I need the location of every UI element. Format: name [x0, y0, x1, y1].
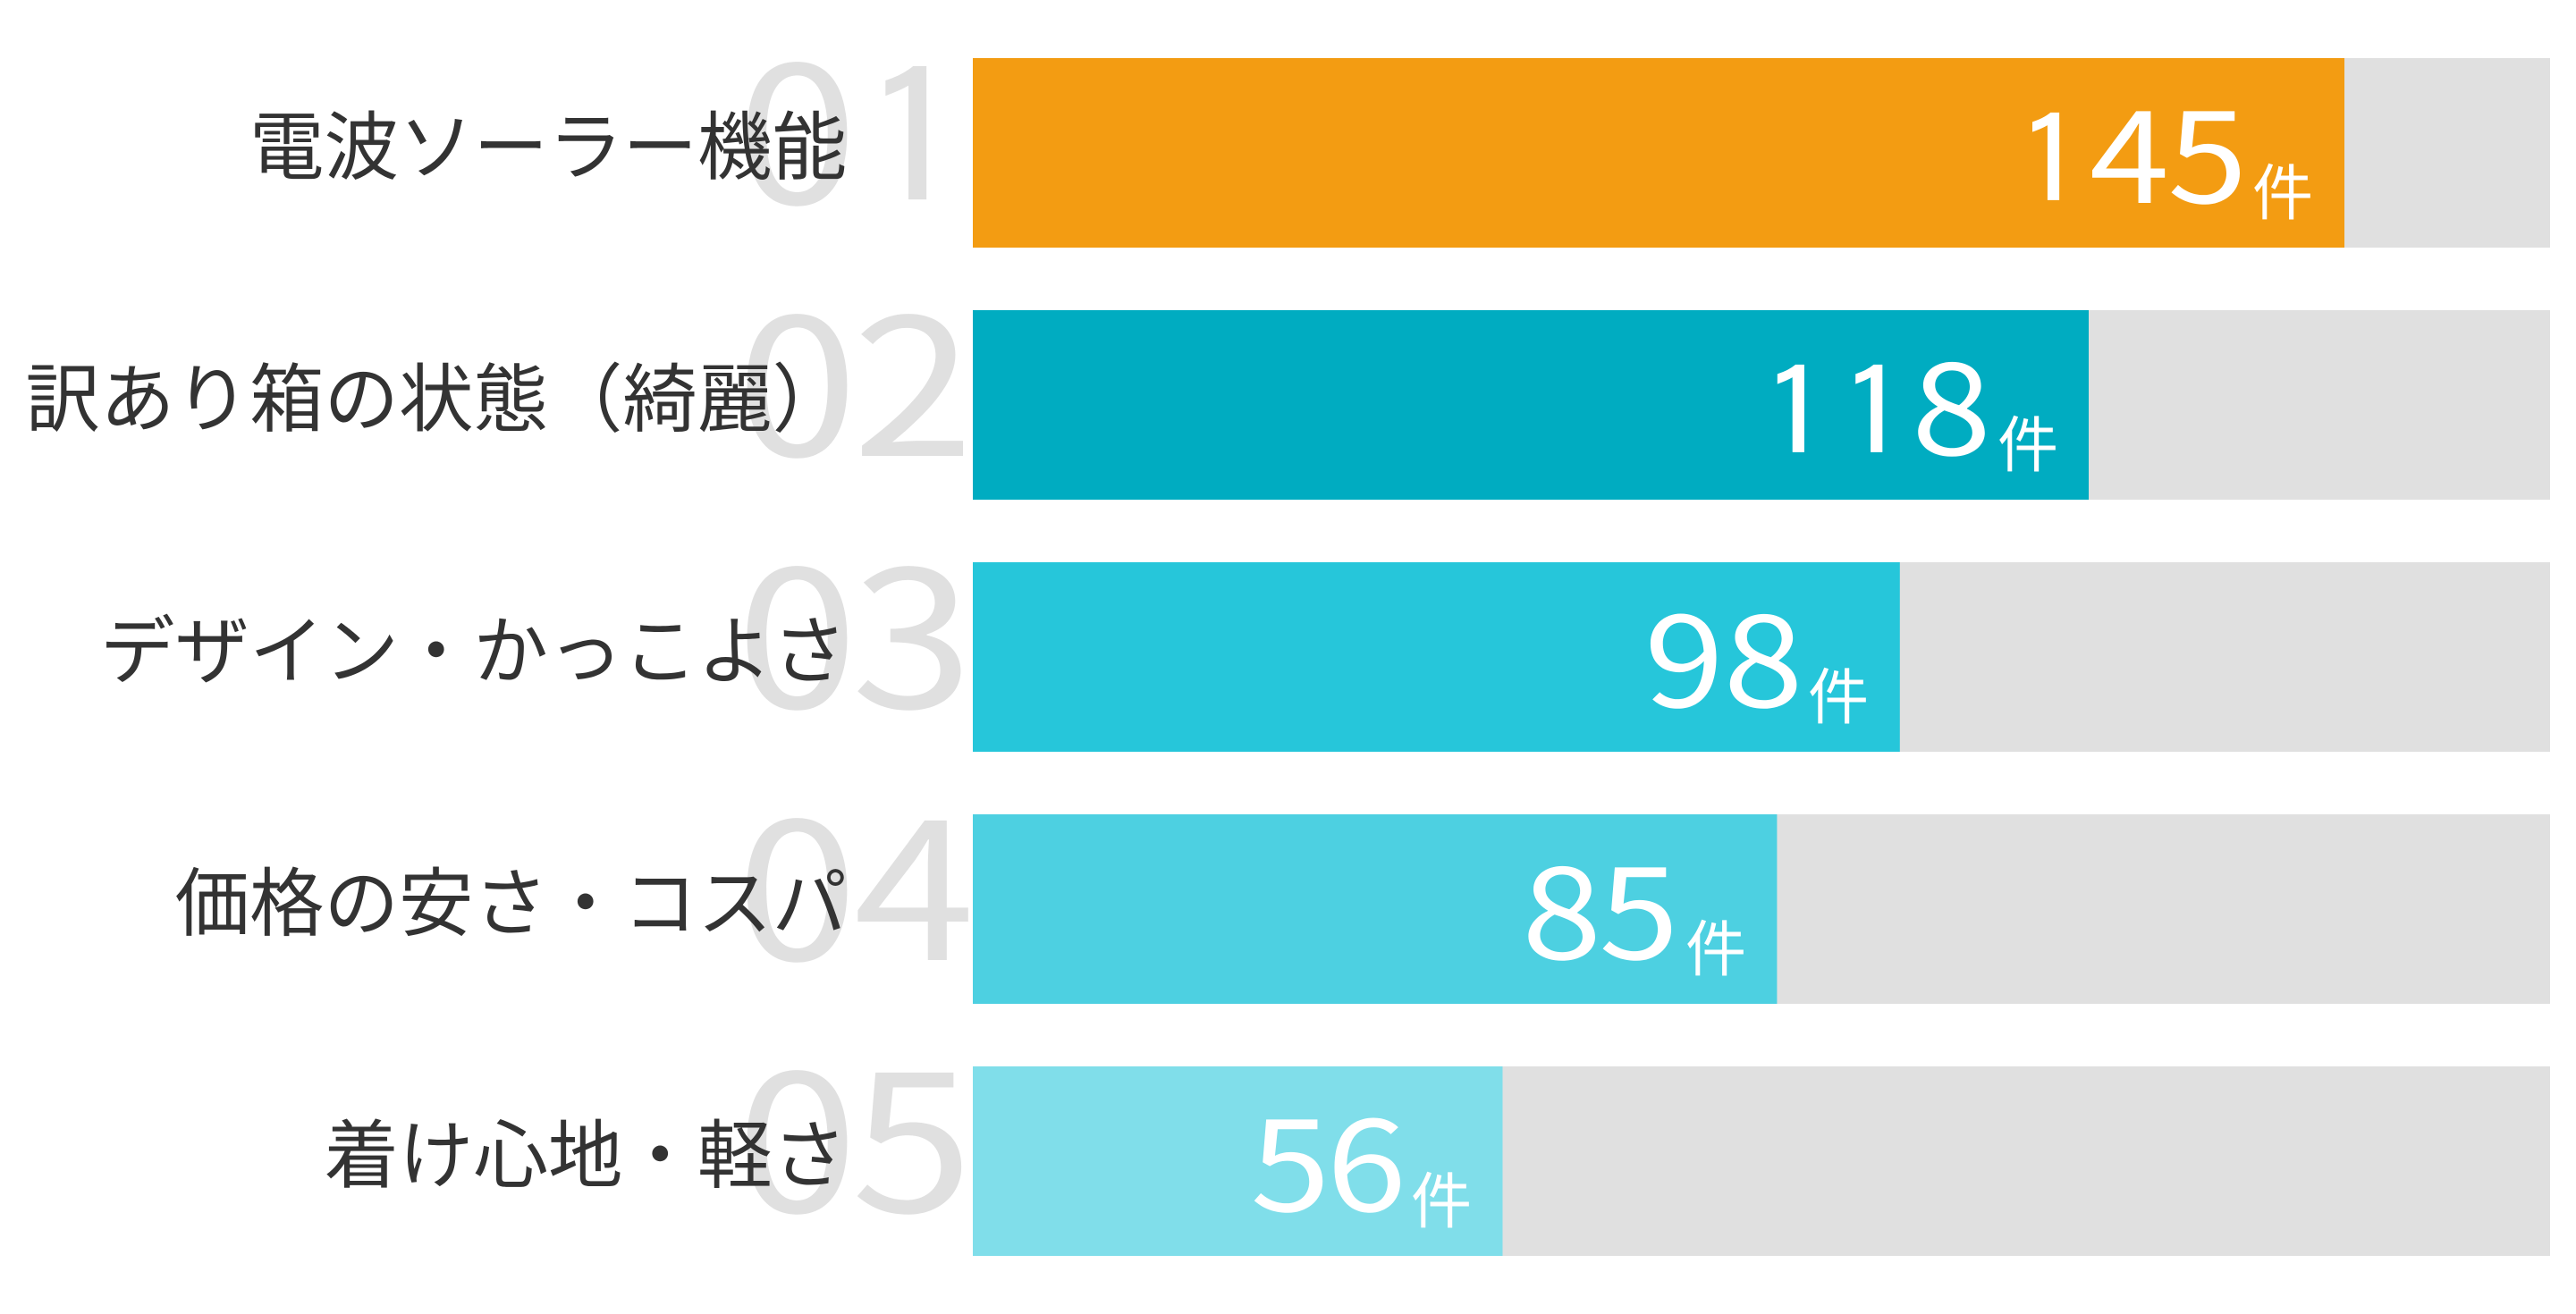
label: 価格の安さ・コスパ — [175, 844, 847, 952]
rank number 02: 02 — [736, 236, 974, 511]
label: 着け心地・軽さ — [324, 1096, 847, 1204]
bar value 98 — [973, 562, 1900, 752]
row 3: デザイン・かっこよさ — [100, 488, 2550, 763]
rank number 04: 04 — [736, 740, 975, 1015]
bar value 145 — [973, 58, 2344, 248]
rank number 01: 1 — [859, 42, 969, 232]
bar value 56 — [973, 1066, 1502, 1256]
value 118: 8 — [1912, 311, 1991, 492]
row 4: 価格の安さ・コスパ — [175, 740, 2550, 1015]
label: 電波ソーラー機能 — [249, 88, 847, 196]
value 85: 85 — [1522, 815, 1679, 996]
rank number 05: 05 — [736, 992, 973, 1268]
row 2: 訳あり箱の状態（綺麗） — [25, 236, 2550, 511]
unit: 件 — [1997, 396, 2058, 484]
unit: 件 — [1411, 1152, 1472, 1241]
unit: 件 — [1685, 900, 1746, 989]
unit: 件 — [2252, 144, 2313, 232]
label: デザイン・かっこよさ — [100, 592, 847, 700]
label: 訳あり箱の状態（綺麗） — [25, 340, 847, 448]
rank number 03: 03 — [736, 488, 973, 763]
value 118: 11 — [1761, 350, 1911, 475]
value 145: 1 — [2015, 97, 2088, 223]
value 98: 98 — [1644, 563, 1803, 744]
unit: 件 — [1808, 648, 1869, 737]
bar track — [973, 310, 2550, 500]
bar value 118 — [973, 310, 2089, 500]
value 56: 56 — [1250, 1067, 1406, 1248]
row 1: 電波ソーラー機能 — [249, 0, 2550, 259]
bar value 85 — [973, 814, 1777, 1004]
bar track — [973, 1066, 2550, 1256]
row 5: 着け心地・軽さ — [324, 992, 2550, 1268]
value 145: 45 — [2090, 59, 2248, 240]
bar track — [973, 562, 2550, 752]
bar track — [973, 58, 2550, 248]
bar track — [973, 814, 2550, 1004]
